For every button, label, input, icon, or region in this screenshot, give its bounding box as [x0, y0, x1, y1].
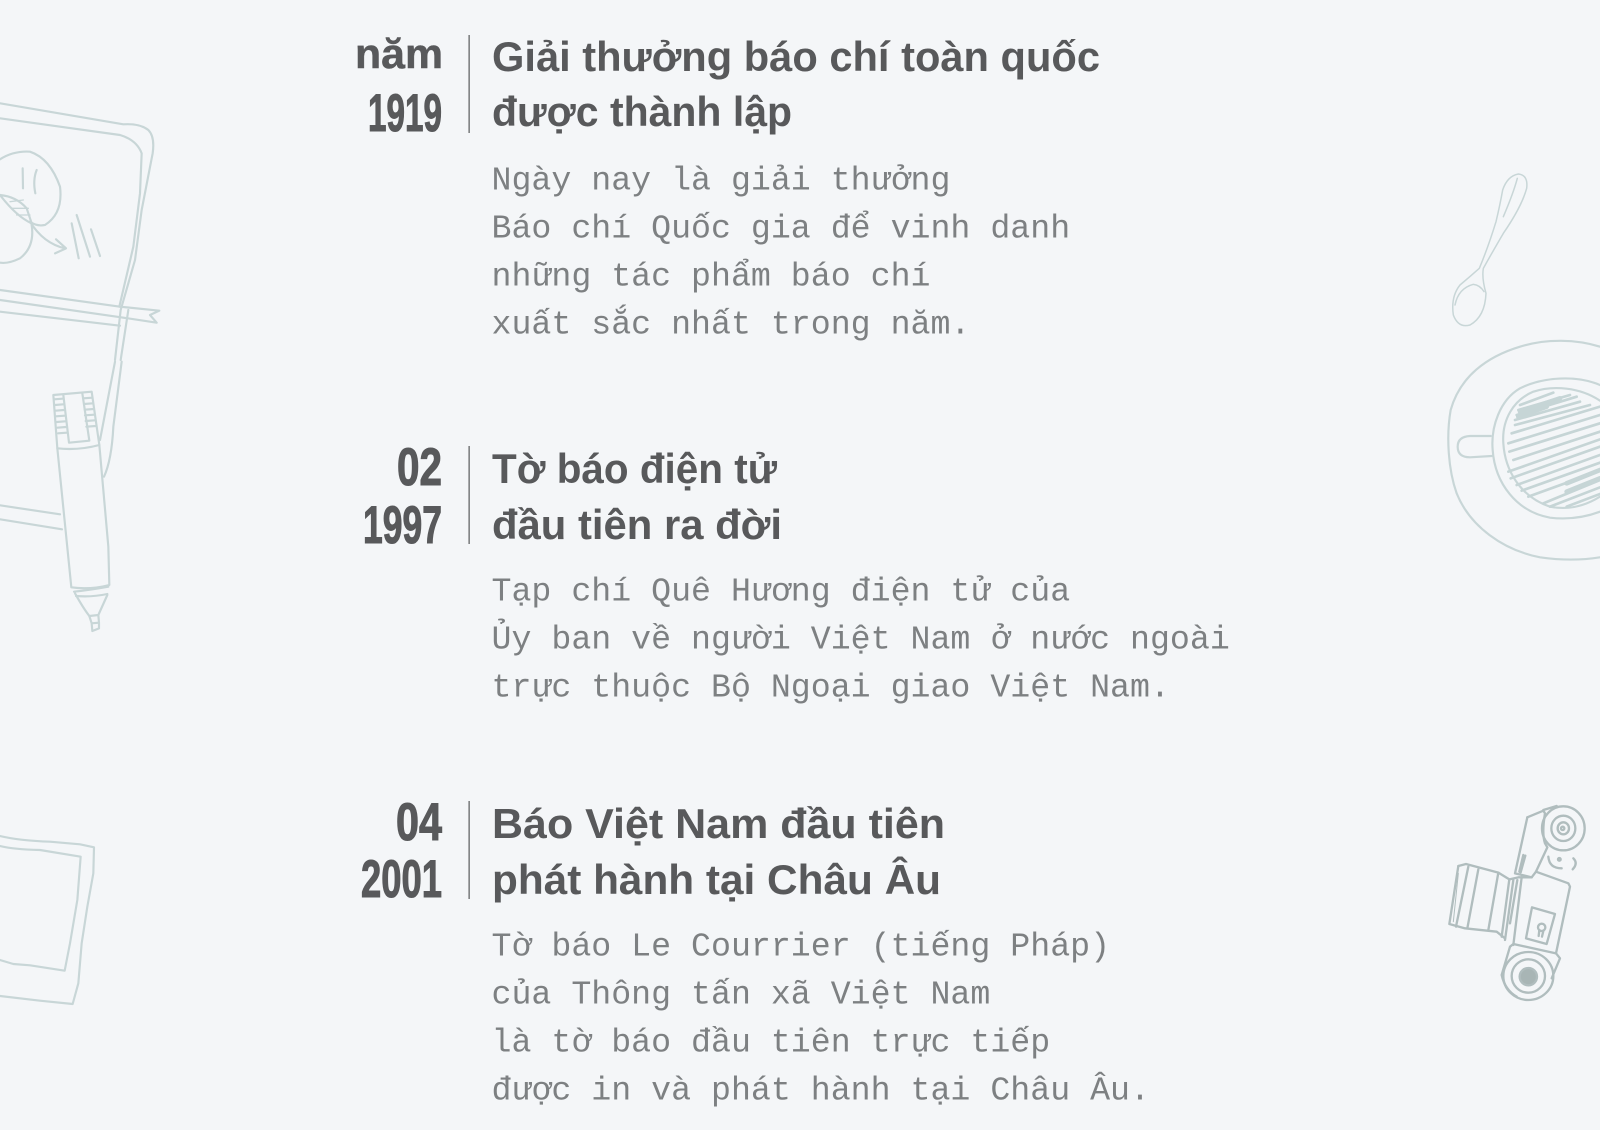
illustration: tablet with sketch and pencil — [0, 103, 159, 360]
date: năm 1919: 1919 — [368, 84, 442, 143]
spoon — [1453, 174, 1527, 326]
description — [492, 572, 1230, 706]
description — [492, 928, 1150, 1110]
date: 04 2001: 04 — [396, 793, 442, 852]
date: 02 1997 — [363, 438, 442, 555]
description: của Thông tấn xã Việt Nam — [492, 976, 990, 1014]
milestone 02/1997 — [363, 438, 1230, 706]
illustration: camera — [1449, 806, 1585, 1000]
illustration: polaroid frame — [0, 836, 94, 1004]
description: được in và phát hành tại Châu Âu. — [492, 1072, 1150, 1110]
heading — [492, 33, 1100, 135]
description: Tạp chí Quê Hương điện tử của — [492, 572, 1070, 610]
coffee surface — [1503, 388, 1600, 508]
heading — [492, 445, 782, 548]
description: những tác phẩm báo chí — [492, 258, 930, 296]
heading: đầu tiên ra đời — [492, 501, 782, 548]
finder window — [1526, 907, 1555, 944]
date: năm 1919 — [355, 30, 443, 143]
description — [492, 162, 1070, 344]
description: Ủy ban về người Việt Nam ở nước ngoài — [492, 618, 1230, 658]
bottom dial — [1503, 952, 1553, 1000]
divider — [468, 446, 470, 544]
illustration: marker pen — [0, 362, 122, 631]
saucer — [1448, 341, 1600, 560]
date: năm 1919: năm — [355, 30, 443, 77]
top dial — [1542, 806, 1585, 850]
description: xuất sắc nhất trong năm. — [492, 304, 970, 344]
heading: Giải thưởng báo chí toàn quốc — [492, 33, 1100, 80]
date: 04 2001 — [361, 793, 442, 909]
cup handle — [1458, 436, 1492, 457]
cup rim — [1492, 378, 1600, 518]
lens — [1458, 864, 1532, 879]
illustration: spoon and coffee cup — [1448, 174, 1600, 560]
milestone 04/2001 — [361, 793, 1150, 1110]
date: 02 1997: 02 — [397, 438, 442, 497]
heading: được thành lập — [492, 88, 792, 135]
date: 04 2001: 2001 — [361, 850, 442, 909]
description: Ngày nay là giải thưởng — [492, 162, 950, 200]
description: trực thuộc Bộ Ngoại giao Việt Nam. — [492, 668, 1170, 706]
heading: Tờ báo điện tử — [492, 445, 778, 492]
description: Tờ báo Le Courrier (tiếng Pháp) — [492, 928, 1110, 966]
divider — [468, 35, 470, 133]
coffee hatching — [1508, 393, 1600, 507]
heading: Báo Việt Nam đầu tiên — [492, 800, 945, 847]
divider — [468, 801, 470, 899]
heading — [492, 800, 945, 903]
camera body — [1502, 806, 1570, 997]
milestone 1919 — [355, 30, 1100, 344]
date: 02 1997: 1997 — [363, 496, 442, 555]
heading: phát hành tại Châu Âu — [492, 855, 941, 903]
description: Báo chí Quốc gia để vinh danh — [492, 210, 1070, 248]
description: là tờ báo đầu tiên trực tiếp — [492, 1024, 1050, 1062]
